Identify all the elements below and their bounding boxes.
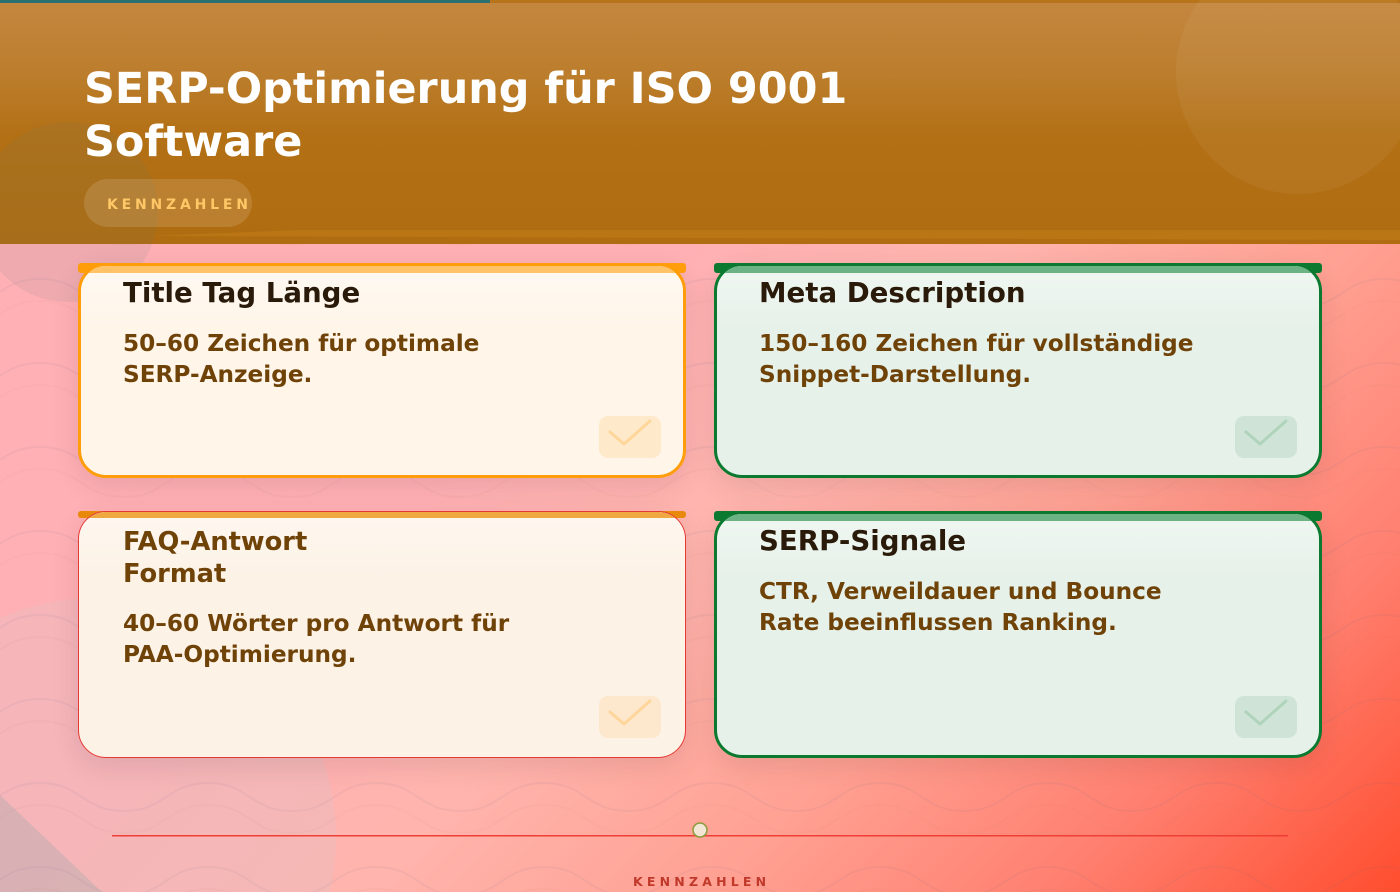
text: [759, 330, 1193, 388]
text: SERP-Anzeige.: [123, 361, 312, 388]
title: SERP-Optimierung für ISO 9001: [84, 64, 847, 114]
header decorative circles: [0, 0, 1400, 244]
panel: FAQ-Antwort Format: [78, 511, 686, 758]
badge: Kennzahlen: KENNZAHLEN: [107, 197, 252, 213]
panel: Meta Description: [714, 263, 1322, 478]
heading: SERP-Signale: [759, 524, 966, 557]
heading: FAQ-Antwort: [123, 527, 307, 557]
icon: check: [599, 696, 661, 738]
text: Rate beeinflussen Ranking.: [759, 609, 1117, 636]
footer label: KENNZAHLEN: [633, 874, 770, 889]
header band: [0, 0, 1400, 244]
heading: Meta Description: [759, 276, 1026, 309]
icon: check: [599, 416, 661, 458]
title: Software: [84, 117, 302, 167]
text: [759, 578, 1162, 636]
text: CTR, Verweildauer und Bounce: [759, 578, 1162, 605]
heading: Title Tag Länge: [123, 276, 360, 309]
heading: [123, 527, 307, 589]
heading: Format: [123, 559, 226, 589]
card shadows: [74, 291, 1326, 770]
badge: Kennzahlen: [84, 179, 252, 227]
text: Snippet-Darstellung.: [759, 361, 1031, 388]
footer divider with dot: [112, 822, 1288, 838]
text: PAA-Optimierung.: [123, 641, 356, 668]
title: [84, 64, 847, 167]
text: [123, 610, 510, 668]
text: [123, 330, 479, 388]
header top accent bar: [0, 0, 1400, 3]
icon: check: [1235, 696, 1297, 738]
panel: Title Tag Länge: [78, 263, 686, 478]
text: 40–60 Wörter pro Antwort für: [123, 610, 509, 637]
icon: check: [1235, 416, 1297, 458]
panel: SERP-Signale: [714, 511, 1322, 758]
text: 50–60 Zeichen für optimale: [123, 330, 479, 357]
text: 150–160 Zeichen für vollständige: [759, 330, 1193, 357]
